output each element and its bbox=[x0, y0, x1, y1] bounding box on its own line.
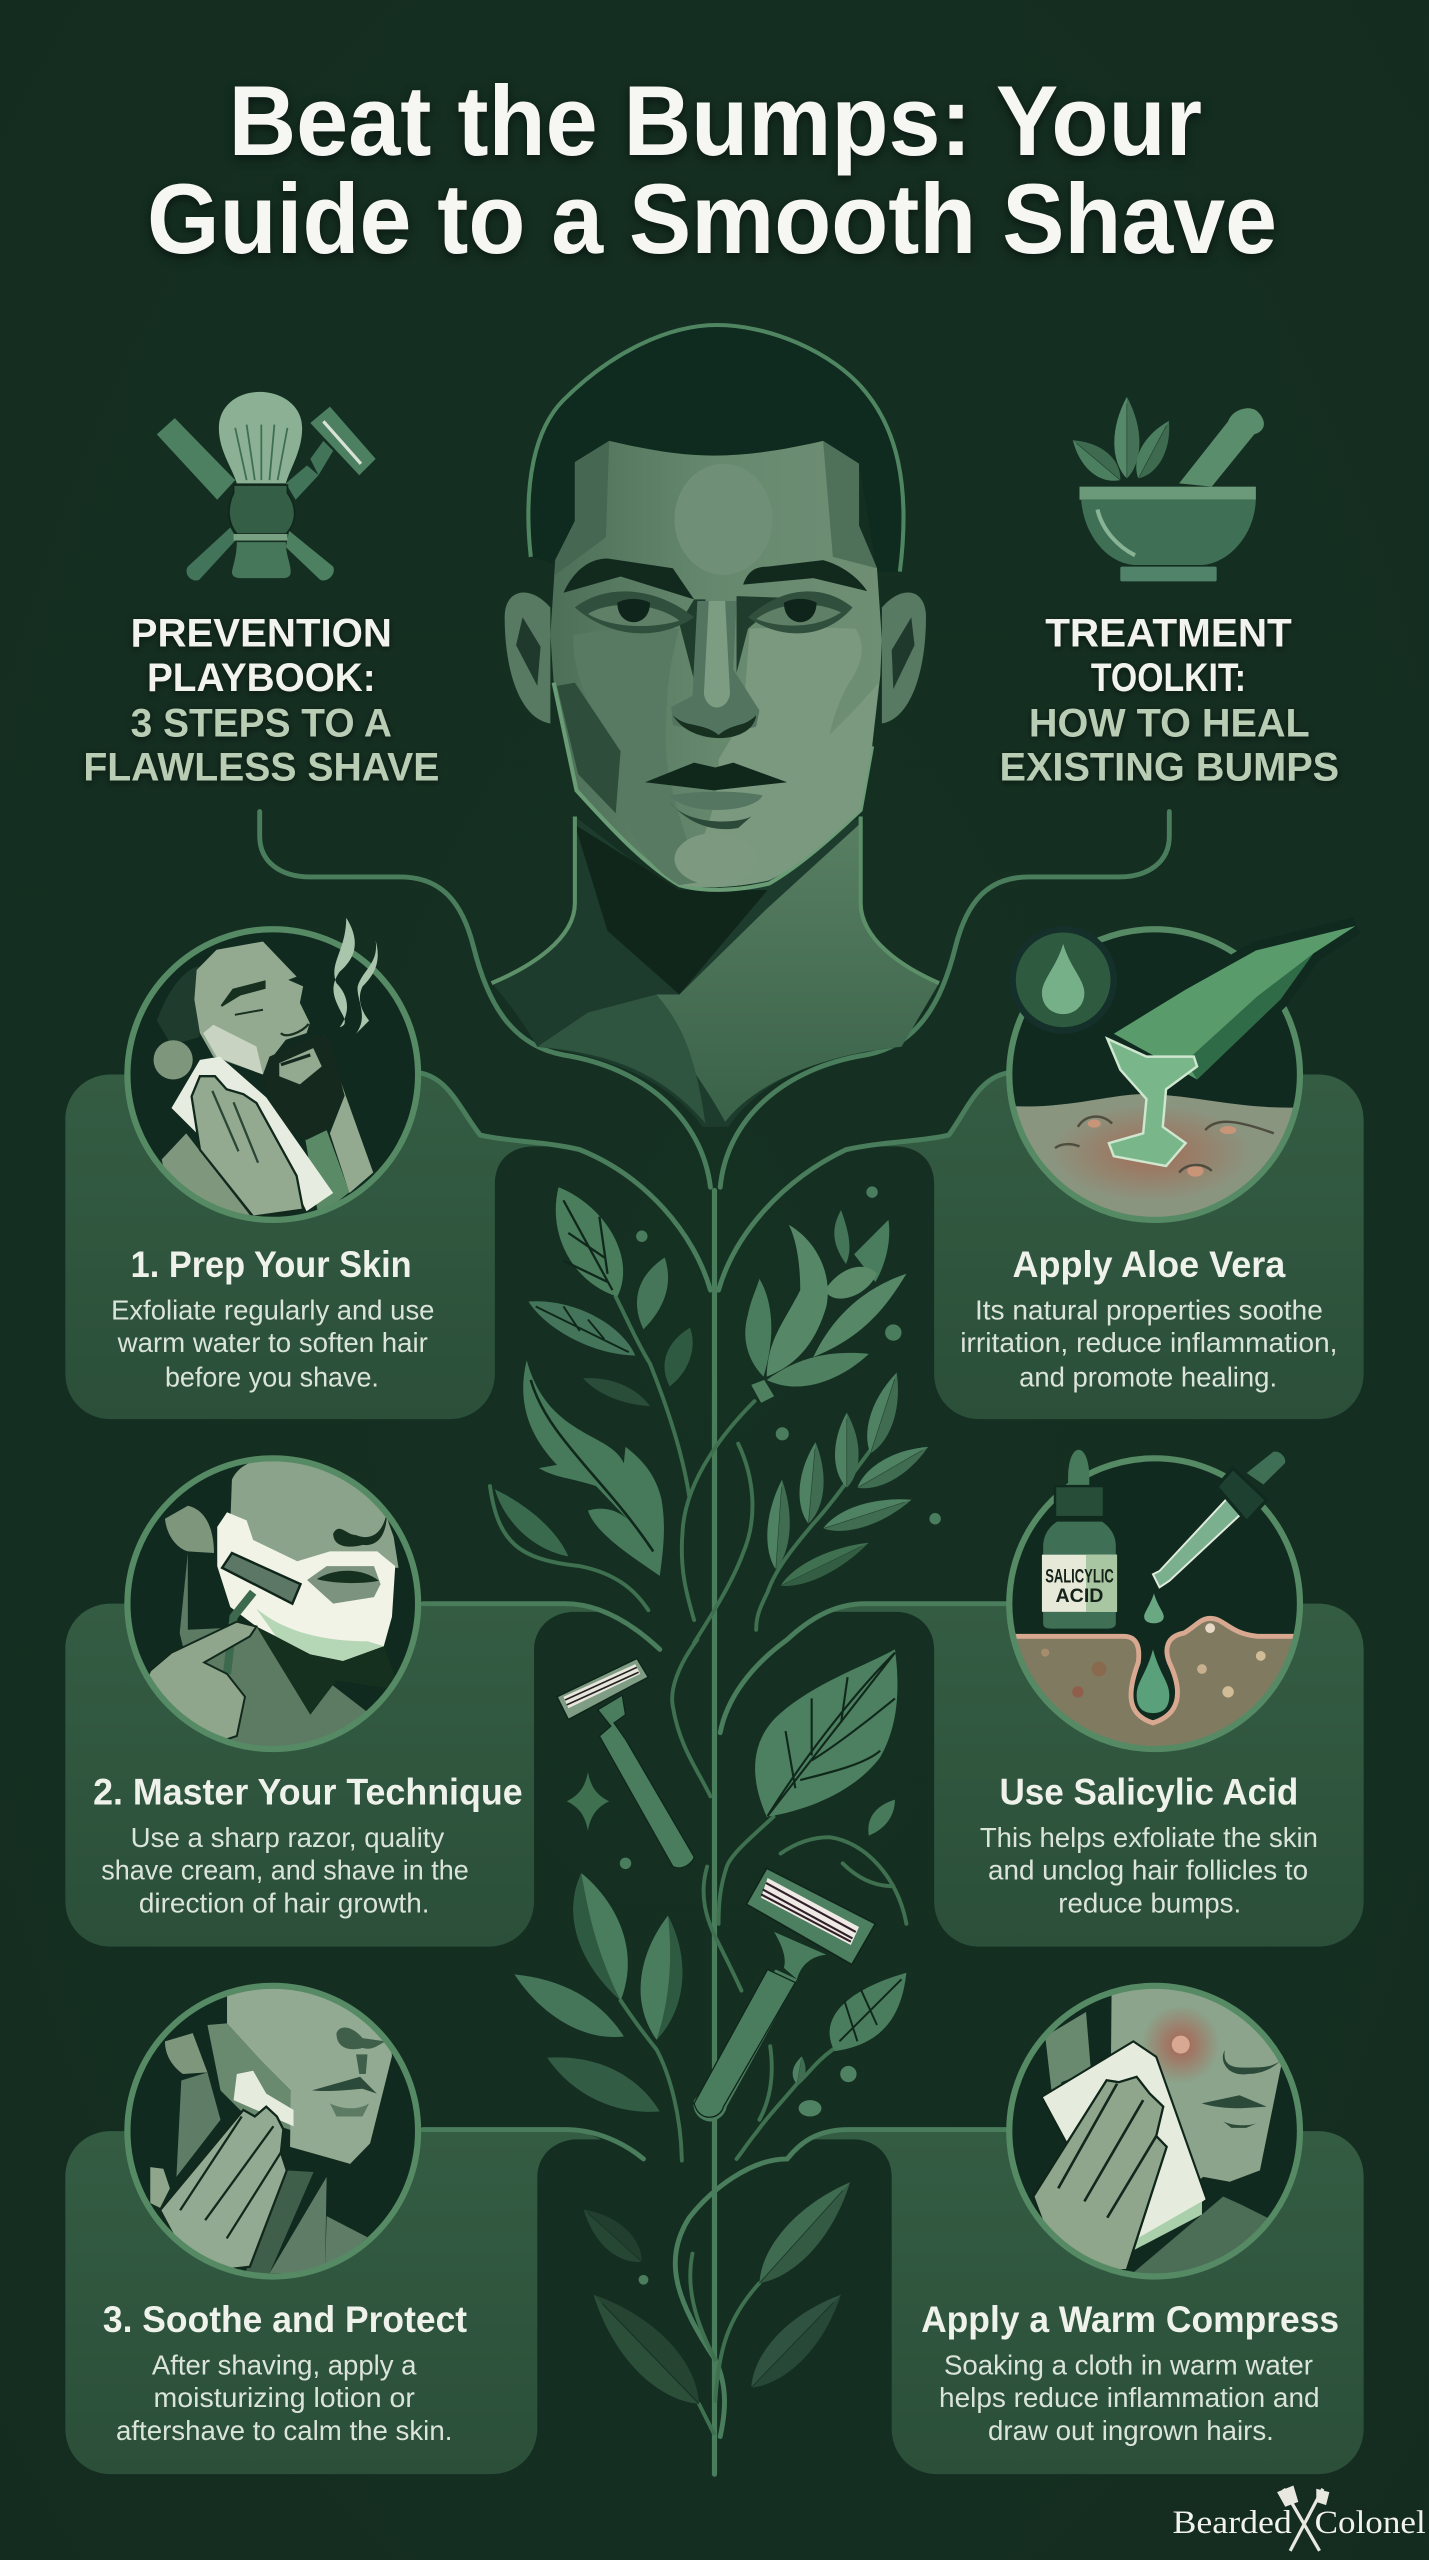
panel: master your technique card bbox=[65, 1604, 601, 1947]
heading: treatment toolkit: TOOLKIT: bbox=[1091, 656, 1246, 700]
towel bbox=[1042, 2041, 1207, 2250]
shirt bbox=[1127, 2196, 1290, 2278]
icon: mortar, pestle and herbs bbox=[1065, 397, 1264, 581]
text: apply a warm compress: Apply a Warm Compress bbox=[921, 2299, 1339, 2340]
gap behind aloe bbox=[1114, 926, 1355, 1079]
neck side bbox=[245, 2170, 314, 2273]
neck and arm bbox=[323, 1033, 373, 1193]
hand bbox=[1033, 2077, 1167, 2273]
circle: aloe vera scene bbox=[1004, 924, 1355, 1228]
text: use salicylic acid: Use Salicylic Acid bbox=[999, 1772, 1298, 1813]
nose bbox=[336, 2028, 385, 2074]
text: apply aloe vera: Its natural properties soothe bbox=[975, 1295, 1323, 1326]
small central leaf bbox=[868, 1800, 895, 1836]
text: soothe and protect bbox=[103, 2299, 467, 2446]
heading: treatment toolkit bbox=[999, 612, 1339, 790]
text: apply aloe vera: Apply Aloe Vera bbox=[1013, 1244, 1286, 1285]
lower right branch leaves bbox=[791, 1973, 906, 2116]
nose bbox=[671, 601, 759, 738]
face bbox=[1111, 1984, 1282, 2196]
cream bbox=[234, 2071, 293, 2126]
heading: prevention playbook: PREVENTION bbox=[131, 612, 392, 656]
text: master your technique: shave cream, and shave in the bbox=[101, 1855, 469, 1886]
text: soothe and protect: 3. Soothe and Protect bbox=[103, 2299, 467, 2340]
text: apply aloe vera: irritation, reduce inflammation, bbox=[960, 1327, 1338, 1358]
skin bbox=[229, 1456, 399, 1568]
neck bbox=[180, 1554, 366, 1746]
text: prep your skin bbox=[111, 1244, 434, 1392]
brush bristles bbox=[219, 392, 302, 483]
bottle: ACID bbox=[1056, 1585, 1103, 1607]
text: apply aloe vera bbox=[960, 1244, 1338, 1392]
ears bbox=[505, 592, 926, 723]
foam shading bbox=[256, 1609, 384, 1661]
panel: use salicylic acid card bbox=[830, 1604, 1364, 1947]
heading: prevention playbook bbox=[83, 612, 439, 790]
dropper bbox=[1144, 1452, 1285, 1623]
text: master your technique: Use a sharp razor, quality bbox=[131, 1822, 444, 1853]
lips bbox=[317, 1571, 379, 1583]
foam bbox=[217, 1512, 395, 1661]
text: soothe and protect: aftershave to calm the skin. bbox=[116, 2415, 452, 2446]
skin ground bbox=[1004, 1094, 1306, 1228]
finger lines bbox=[1058, 2084, 1156, 2218]
aloe leaf bbox=[1114, 926, 1355, 1079]
face bbox=[227, 1984, 392, 2164]
heading: prevention playbook: 3 STEPS TO A bbox=[131, 702, 392, 746]
text: use salicylic acid: and unclog hair follicles to bbox=[988, 1855, 1308, 1886]
chest and shoulders bbox=[492, 817, 939, 1127]
text: prep your skin: Exfoliate regularly and use bbox=[111, 1295, 434, 1326]
illustration: central botanical stems and leaves bbox=[490, 1186, 941, 2433]
redness and pimple bbox=[1142, 2005, 1220, 2084]
jaw outline bbox=[554, 683, 872, 890]
circle: warm compress scene bbox=[1008, 1981, 1308, 2281]
chest bbox=[305, 1130, 350, 1217]
ear bbox=[165, 1506, 214, 1553]
cards layer bbox=[65, 1075, 1364, 2474]
follicle drop bbox=[1137, 1649, 1169, 1713]
circle: technique scene bbox=[123, 1453, 423, 1764]
text: use salicylic acid bbox=[980, 1772, 1318, 1918]
lower left leaves bbox=[514, 1873, 682, 2112]
ear bbox=[165, 2033, 207, 2074]
hair outline bbox=[528, 325, 904, 572]
title: Beat the Bumps: Your bbox=[229, 66, 1202, 177]
text: prep your skin: before you shave. bbox=[165, 1361, 379, 1392]
bottom leaves bbox=[574, 2170, 863, 2419]
text: master your technique: direction of hair growth. bbox=[139, 1887, 430, 1918]
watermark: Bearded Colonel: Bearded bbox=[1173, 2505, 1292, 2541]
panel: prep your skin card bbox=[65, 1075, 572, 1419]
skin with pore bbox=[1004, 1618, 1306, 1756]
watermark: Bearded Colonel: Colonel bbox=[1315, 2505, 1426, 2541]
leaf: lower left outline bbox=[495, 1489, 568, 1556]
icon: steam bbox=[333, 918, 378, 1034]
berries bbox=[620, 1186, 941, 2285]
mouth gap bbox=[307, 1566, 381, 1604]
text: prep your skin: warm water to soften hair bbox=[117, 1327, 428, 1358]
leaf: upper left large bbox=[556, 1187, 623, 1297]
straight razor bbox=[157, 418, 334, 580]
icon: large razor bbox=[694, 1868, 875, 2122]
leaves: upper left small bbox=[528, 1257, 693, 1406]
icon: small razor bbox=[557, 1658, 694, 1868]
dots bbox=[1041, 1623, 1266, 1698]
eyes bbox=[575, 591, 852, 633]
panel: soothe and protect card bbox=[65, 2131, 601, 2474]
brush handle bbox=[229, 485, 295, 534]
thumb bbox=[150, 2167, 170, 2208]
eyebrows and eye sockets bbox=[563, 559, 867, 699]
text: prep your skin: 1. Prep Your Skin bbox=[131, 1244, 412, 1285]
face bbox=[194, 941, 310, 1075]
illustration: man's face and neck bbox=[492, 325, 939, 1127]
panel: apply aloe vera card bbox=[857, 1075, 1364, 1419]
bump ridges bbox=[1055, 1117, 1274, 1173]
text: use salicylic acid: reduce bumps. bbox=[1058, 1887, 1241, 1918]
lips bbox=[645, 763, 787, 829]
pimple bbox=[1172, 2036, 1190, 2054]
leaf: feathered bbox=[523, 1360, 664, 1576]
hair bbox=[157, 966, 203, 1045]
icon: crossed razor, brush and strop bbox=[157, 392, 376, 580]
aloe gel bbox=[1107, 1039, 1197, 1166]
mouth bbox=[281, 1055, 310, 1065]
face bbox=[550, 441, 882, 887]
text: soothe and protect: After shaving, apply a bbox=[152, 2349, 417, 2380]
text: master your technique bbox=[93, 1772, 523, 1918]
bottle bbox=[1042, 1450, 1290, 1630]
watermark: Bearded Colonel bbox=[1173, 2486, 1426, 2551]
text: master your technique: 2. Master Your Technique bbox=[93, 1772, 523, 1813]
text: apply a warm compress: Soaking a cloth in warm water bbox=[944, 2349, 1313, 2380]
heading: prevention playbook: PLAYBOOK: bbox=[147, 656, 376, 700]
bottle: SALICYLIC bbox=[1045, 1565, 1114, 1587]
razor bbox=[222, 1553, 301, 1604]
circle: salicylic acid scene bbox=[1004, 1450, 1308, 1756]
lips area bbox=[279, 1048, 322, 1084]
redness bbox=[1050, 1104, 1253, 1202]
neck bbox=[176, 2072, 220, 2177]
text: use salicylic acid: This helps exfoliate the skin bbox=[980, 1822, 1318, 1853]
face shading planes bbox=[555, 441, 879, 887]
finger lines bbox=[180, 2116, 281, 2238]
towel fold bbox=[1133, 2201, 1202, 2250]
heading: treatment toolkit: TREATMENT bbox=[1045, 612, 1292, 656]
heading: prevention playbook: FLAWLESS SHAVE bbox=[83, 746, 439, 790]
heading: treatment toolkit: EXISTING BUMPS bbox=[999, 746, 1339, 790]
title bbox=[147, 66, 1277, 275]
safety razor bbox=[187, 441, 333, 580]
shirt bbox=[269, 2177, 367, 2273]
panel: apply a warm compress card bbox=[813, 2131, 1364, 2474]
towel bbox=[172, 1057, 333, 1211]
text: apply a warm compress: helps reduce inflammation and bbox=[939, 2382, 1320, 2413]
brow and closed eye bbox=[221, 981, 265, 1015]
leaves: right branch bbox=[765, 1369, 934, 1595]
skin membrane bbox=[1004, 1618, 1306, 1723]
badge: water drop bbox=[1009, 926, 1117, 1034]
large central leaf bbox=[755, 1649, 897, 1817]
hand bbox=[150, 1620, 258, 1740]
text: apply a warm compress bbox=[921, 2299, 1339, 2446]
text: apply aloe vera: and promote healing. bbox=[1019, 1361, 1277, 1392]
bumps bbox=[1088, 1119, 1236, 1177]
ear and neck bbox=[1045, 2012, 1091, 2107]
vines bbox=[490, 1297, 906, 2433]
hand bbox=[160, 2107, 287, 2273]
hand bbox=[192, 1076, 303, 1217]
icon: sparkle bbox=[567, 1772, 609, 1831]
heading: treatment toolkit: HOW TO HEAL bbox=[1029, 702, 1310, 746]
title: Guide to a Smooth Shave bbox=[147, 164, 1277, 275]
nose and lips bbox=[1202, 2050, 1280, 2128]
shoulder bbox=[162, 1134, 250, 1215]
connector lines bbox=[260, 812, 1169, 2474]
flower bbox=[745, 1210, 906, 1403]
drop bbox=[1144, 1593, 1164, 1623]
ear bbox=[154, 1040, 193, 1079]
beard bbox=[263, 1035, 345, 1140]
circle: soothe scene bbox=[123, 1981, 423, 2281]
stubble bbox=[203, 1025, 263, 1075]
shaded jaw bbox=[207, 2023, 294, 2131]
hair bbox=[528, 325, 904, 572]
nose bbox=[281, 1024, 309, 1035]
lips bbox=[312, 2077, 377, 2094]
circle: prep your skin scene bbox=[123, 918, 423, 1241]
text: soothe and protect: moisturizing lotion or bbox=[154, 2382, 415, 2413]
text: apply a warm compress: draw out ingrown hairs. bbox=[988, 2415, 1274, 2446]
nose bbox=[333, 1517, 387, 1547]
jaw shadow bbox=[257, 1627, 332, 1715]
